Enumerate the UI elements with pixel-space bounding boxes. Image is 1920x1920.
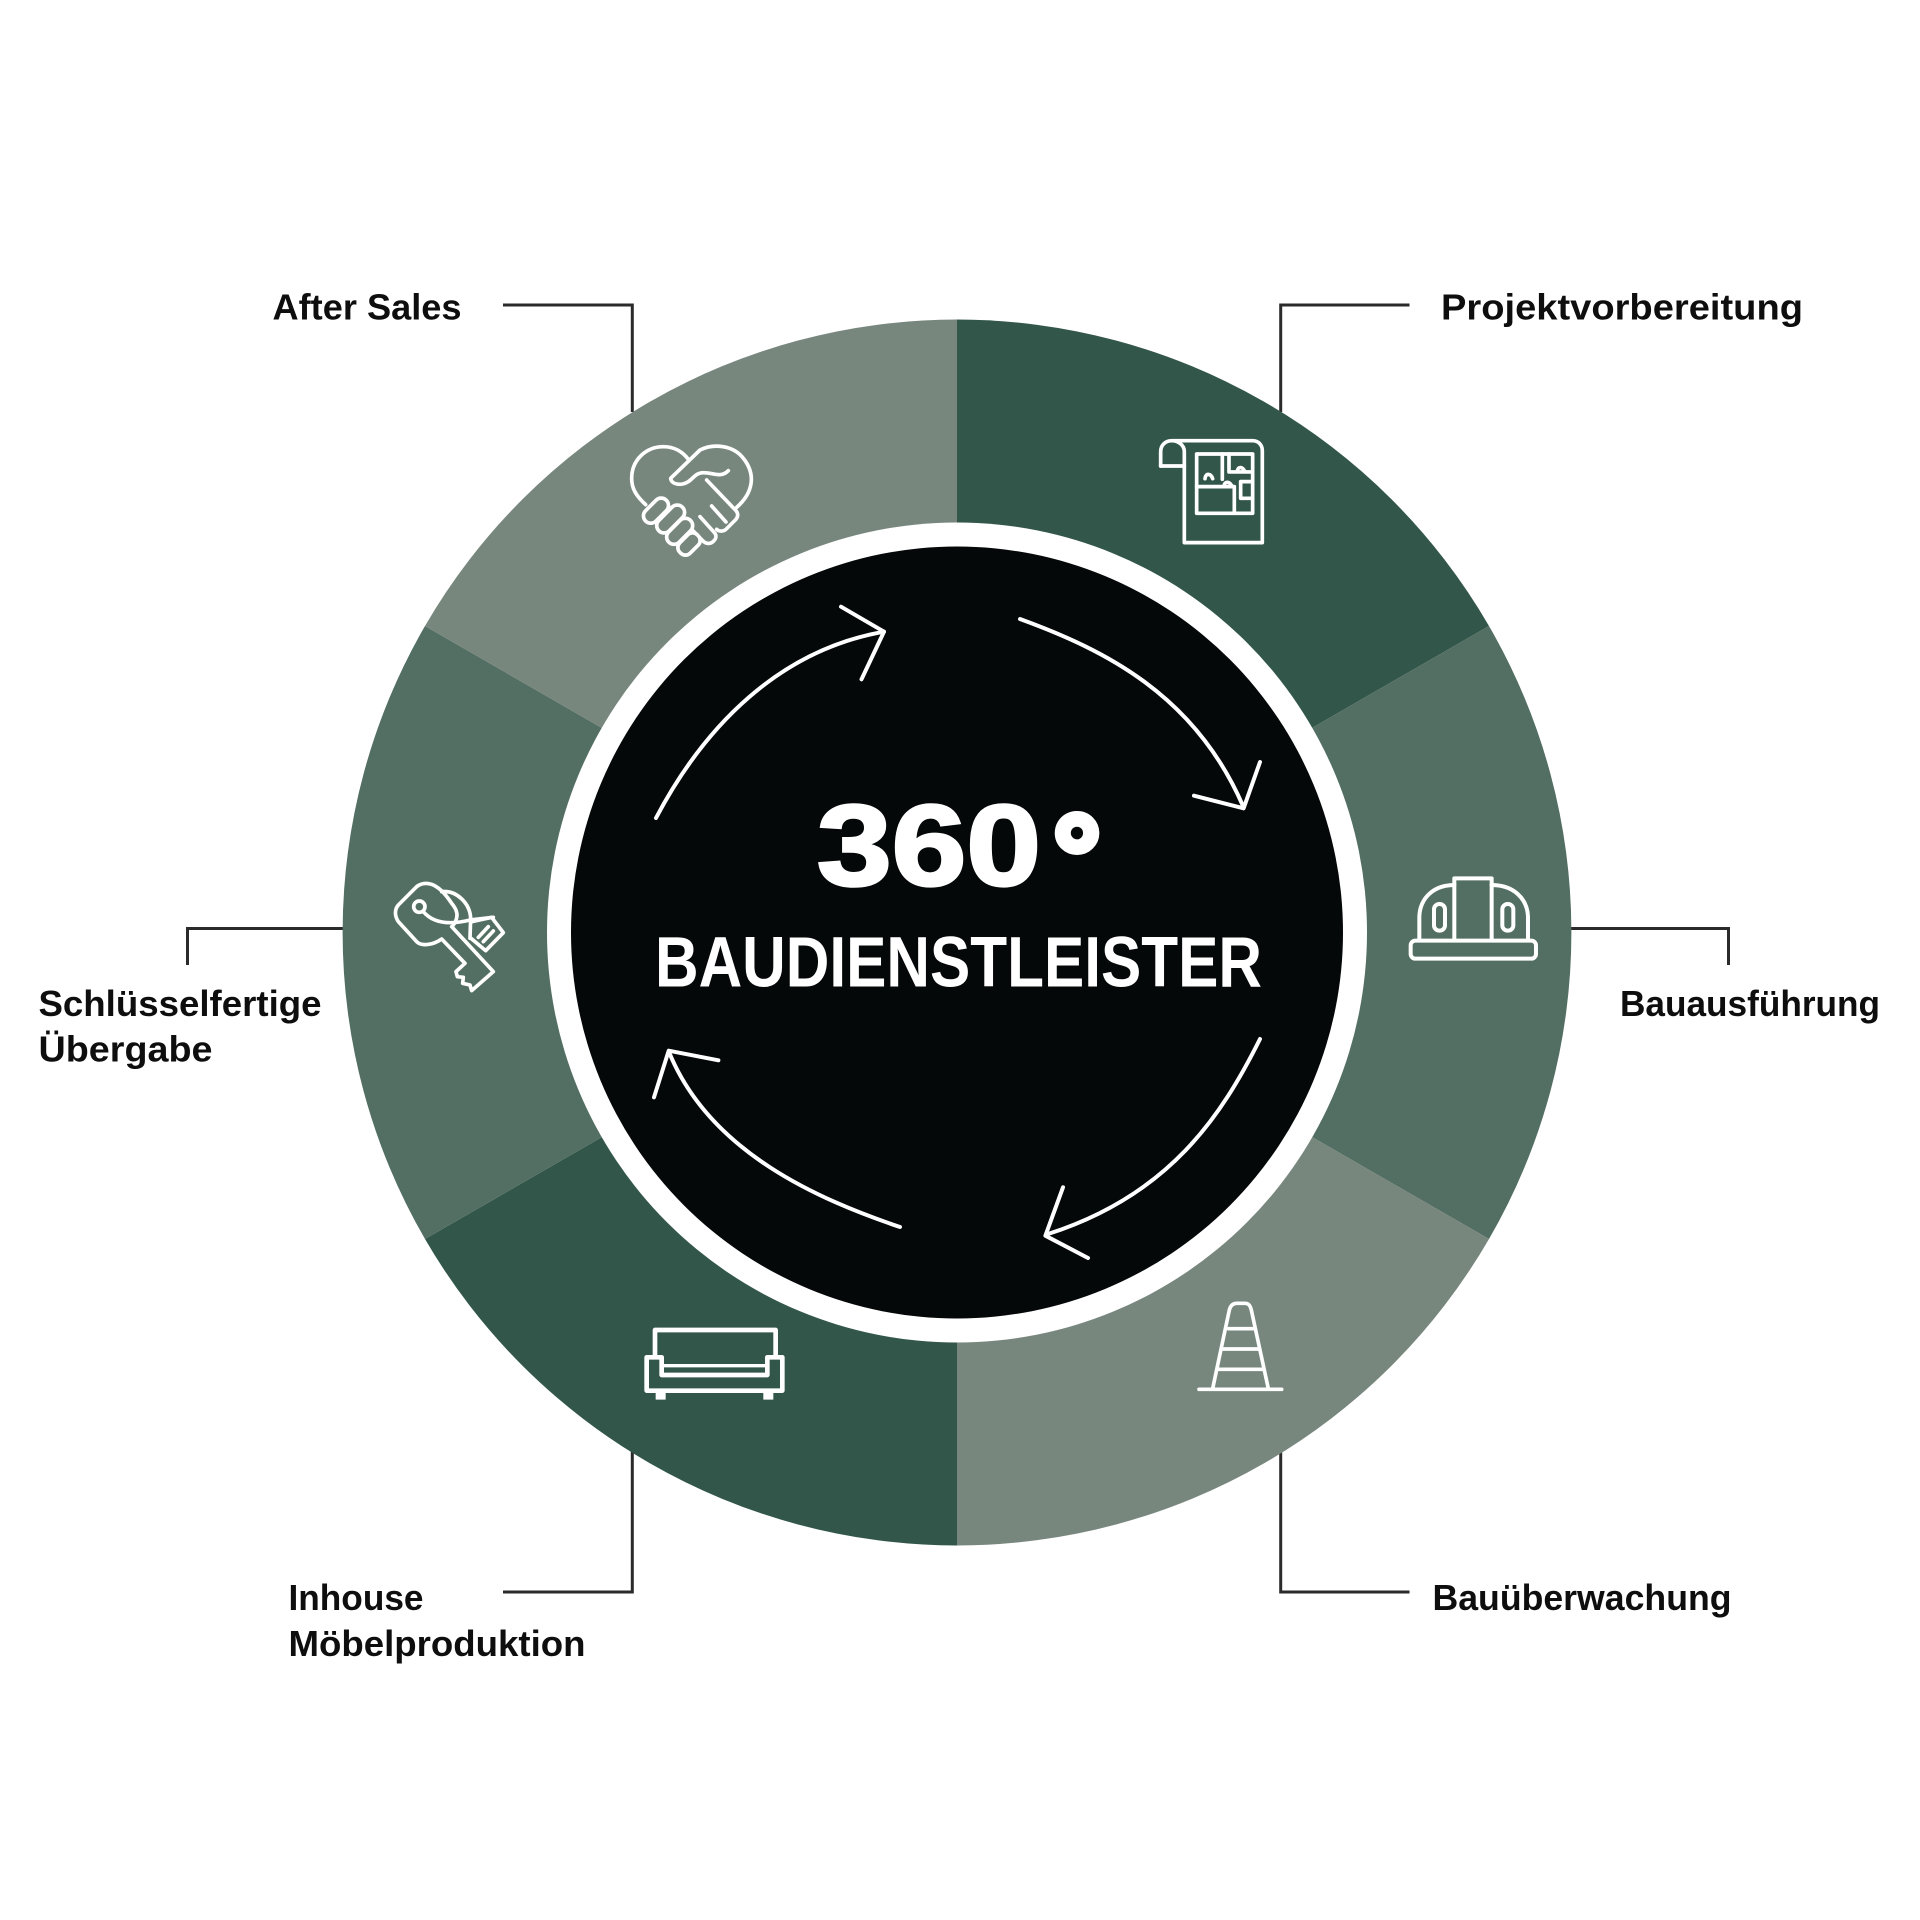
label: Inhouse Möbelproduktion: Inhouse — [288, 1577, 424, 1618]
segmented outer ring — [343, 320, 1571, 1546]
icon: traffic cone — [1199, 1303, 1282, 1389]
connector: Bauausführung — [1568, 928, 1728, 965]
connector: Schlüsselfertige Übergabe — [188, 928, 345, 965]
segment: Projektvorbereitung — [957, 320, 1489, 932]
white inner ring — [547, 522, 1367, 1342]
icon: handshake heart — [632, 446, 751, 558]
connector: After Sales — [503, 305, 632, 412]
icon: keys with tag — [395, 883, 503, 991]
arrow: bottom to left — [654, 1051, 900, 1227]
label: Bauüberwachung: Bauüberwachung — [1432, 1577, 1732, 1618]
arrow: top to right — [1020, 619, 1260, 808]
heading: BAUDIENSTLEISTER: BAUDIENSTLEISTER — [655, 924, 1262, 1002]
segment: Schlüsselfertige Übergabe — [343, 626, 957, 1239]
icon: floor plan — [1161, 441, 1262, 543]
arrow: right to bottom — [1045, 1039, 1260, 1258]
heading: 360°: ° — [1053, 790, 1101, 924]
segment: Bauausführung — [957, 626, 1571, 1239]
label: Schlüsselfertige Übergabe — [38, 983, 322, 1070]
label: After Sales: After Sales — [272, 286, 462, 328]
circular arrows — [654, 607, 1260, 1258]
segment: Inhouse Möbelproduktion — [425, 932, 957, 1546]
segment: Bauüberwachung — [957, 932, 1489, 1546]
label: Inhouse Möbelproduktion — [288, 1577, 586, 1664]
segment: After Sales — [425, 320, 957, 932]
label: Schlüsselfertige Übergabe: Übergabe — [38, 1028, 212, 1070]
connector: Inhouse Möbelproduktion — [503, 1450, 632, 1592]
label: Schlüsselfertige Übergabe: Schlüsselfertige — [38, 983, 322, 1024]
black centre disc — [571, 546, 1343, 1318]
label: Projektvorbereitung: Projektvorbereitung — [1441, 286, 1803, 328]
icon: sofa — [647, 1330, 782, 1399]
heading: 360°: 360 — [817, 782, 1041, 910]
connector: Projektvorbereitung — [1281, 305, 1410, 412]
label: Inhouse Möbelproduktion: Möbelproduktion — [288, 1623, 586, 1664]
connector: Bauüberwachung — [1281, 1450, 1410, 1592]
icon: hard hat — [1411, 878, 1536, 959]
label: Bauausführung: Bauausführung — [1620, 983, 1880, 1024]
arrow: lower left to top — [656, 607, 884, 818]
